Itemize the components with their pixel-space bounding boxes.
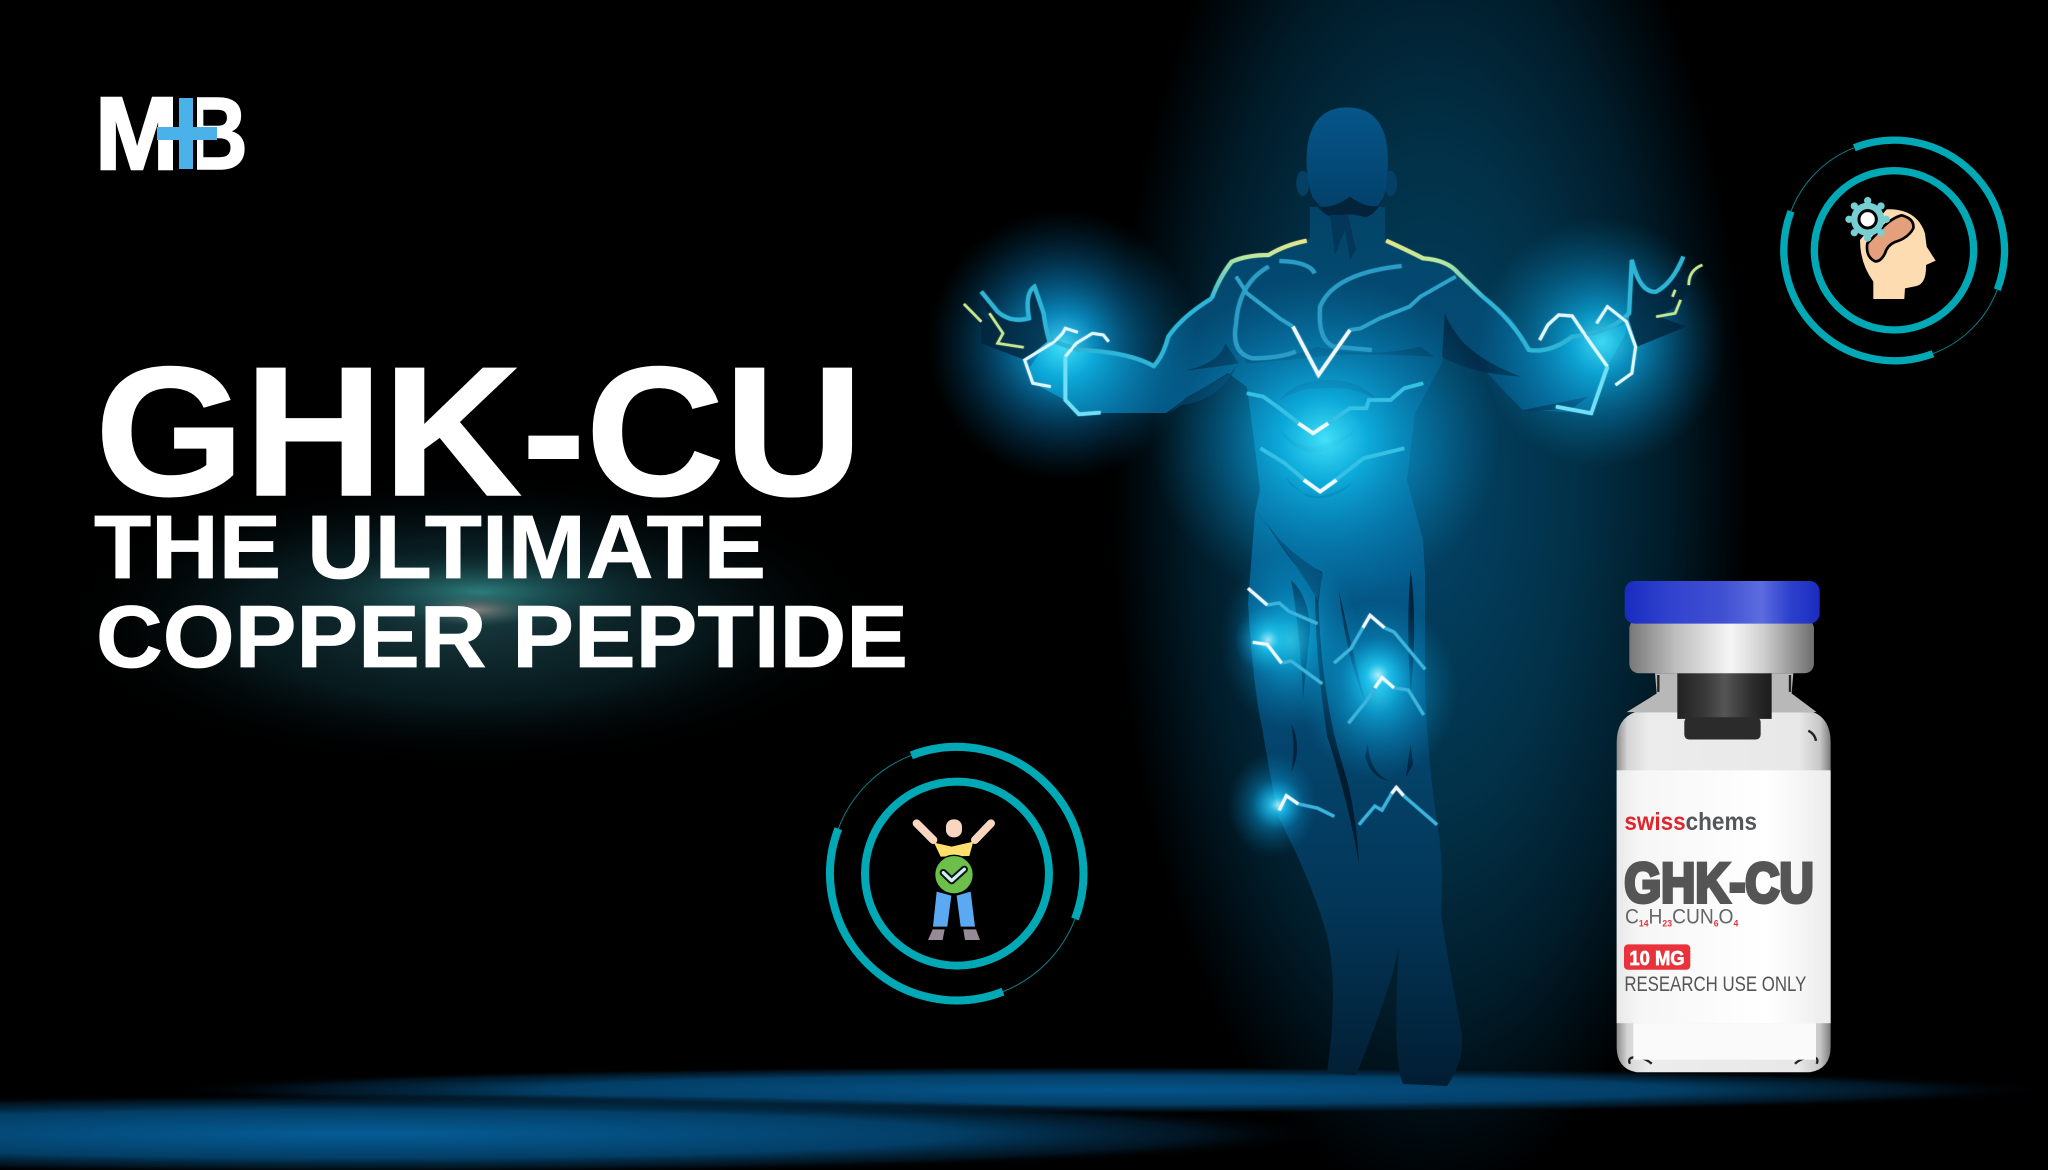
chemical formula: C	[1625, 905, 1640, 928]
logo: M+B	[95, 76, 248, 191]
abdomen lightning	[1247, 383, 1423, 482]
blue cap	[1625, 581, 1820, 624]
muscle shadows	[1168, 313, 1588, 600]
left hand lightning	[1025, 328, 1109, 387]
vial neck	[1627, 673, 1817, 712]
logo: M+B: B	[184, 76, 248, 191]
chemical formula: 6	[1714, 917, 1719, 929]
hands	[964, 257, 1702, 360]
head	[1296, 107, 1397, 217]
shoulder rims and arm edges	[964, 241, 1702, 366]
circular badge: head with gear	[1784, 140, 2004, 361]
icon: head and gear	[1845, 197, 1936, 299]
chemical formula: 14	[1639, 917, 1649, 929]
title: GHK-CU: GHK-CU	[95, 328, 863, 534]
chemical formula: H	[1649, 905, 1662, 928]
neck tendons	[1330, 215, 1356, 260]
chemical formula: 4	[1733, 917, 1739, 929]
chemical formula: O	[1719, 905, 1733, 928]
chemical formula: CUN	[1672, 905, 1714, 928]
leg shadows	[1265, 520, 1414, 864]
glass glints	[1629, 675, 1817, 1064]
dosage badge: 10 MG	[1629, 948, 1685, 970]
badge rings	[830, 747, 1083, 1000]
subtitle line 2: COPPER PEPTIDE	[96, 587, 908, 686]
research notice: RESEARCH USE ONLY	[1624, 972, 1806, 996]
subtitle line 1: THE ULTIMATE	[94, 498, 766, 598]
lightning on legs	[1248, 588, 1437, 825]
body silhouette	[1030, 207, 1626, 1086]
glow: hands, abdomen, thighs	[928, 210, 1727, 857]
vertical light beam	[1110, 0, 1750, 1170]
rubber stopper	[1677, 673, 1772, 740]
figure: glowing muscular body	[928, 107, 1727, 1086]
lightning on upper body	[964, 241, 1702, 492]
product vial	[1617, 581, 1831, 1072]
icon: person with check	[917, 819, 991, 940]
product name: GHK-CU	[1624, 852, 1814, 914]
floor glow bands	[0, 1066, 2048, 1170]
vial body	[1617, 712, 1831, 1072]
vial label	[1617, 770, 1831, 1023]
brand name: swisschems	[1624, 809, 1757, 836]
circular badge: person with check	[830, 747, 1083, 1000]
badge rings	[1784, 140, 2004, 361]
glow behind title	[50, 470, 890, 770]
logo: M+B: M	[95, 76, 179, 191]
right hand lightning	[1540, 315, 1607, 367]
powder	[1633, 1023, 1816, 1060]
silver crimp	[1629, 619, 1814, 673]
chest lightning	[1235, 261, 1401, 358]
chemical formula: 23	[1662, 917, 1672, 929]
